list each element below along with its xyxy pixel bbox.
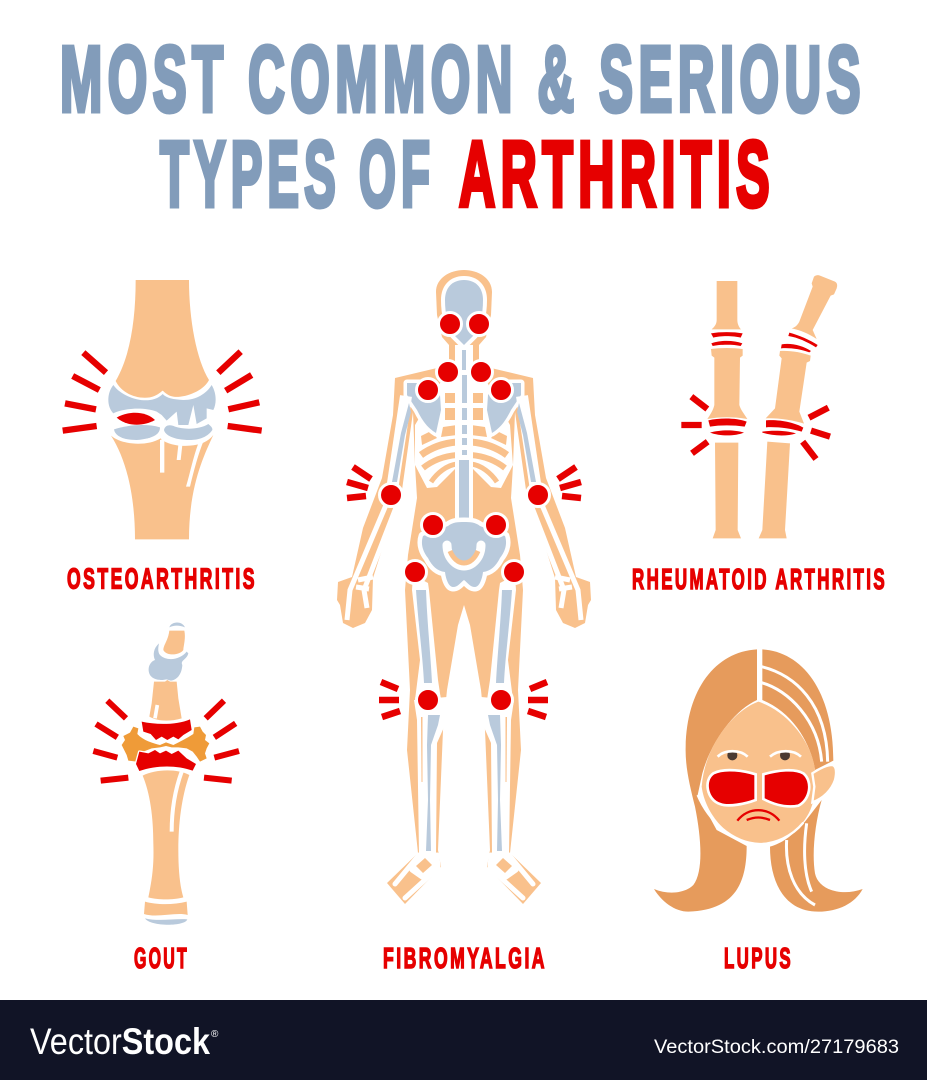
label: lupus: LUPUS xyxy=(724,943,793,975)
icon: fibromyalgia body skeleton xyxy=(337,270,591,904)
pelvis xyxy=(422,522,506,587)
footer registered mark: ® xyxy=(211,1029,219,1040)
pain rays xyxy=(347,467,581,717)
icon: osteoarthritis knee joint xyxy=(63,280,262,539)
label: osteoarthritis: OSTEOARTHRITIS xyxy=(67,564,257,596)
skull xyxy=(445,280,483,345)
footer logo: VectorStock xyxy=(30,1021,210,1062)
footer bar xyxy=(0,1000,927,1080)
label: fibromyalgia: FIBROMYALGIA xyxy=(383,943,547,975)
label: gout: GOUT xyxy=(134,943,189,975)
icon: rheumatoid arthritis finger bones xyxy=(681,275,837,538)
icon: gout toe joint xyxy=(93,622,239,925)
arm and leg bones (left, mirrored right) xyxy=(347,396,581,898)
shoulder blades xyxy=(407,383,521,433)
footer url: VectorStock.com/27179683 xyxy=(654,1037,899,1058)
spine xyxy=(455,345,473,520)
title: TYPES OF xyxy=(160,122,435,226)
icon: lupus face xyxy=(654,649,863,912)
body silhouette xyxy=(337,270,591,904)
title xyxy=(60,27,866,226)
skeleton ribcage xyxy=(415,380,513,518)
inflamed joint markers xyxy=(380,312,550,712)
